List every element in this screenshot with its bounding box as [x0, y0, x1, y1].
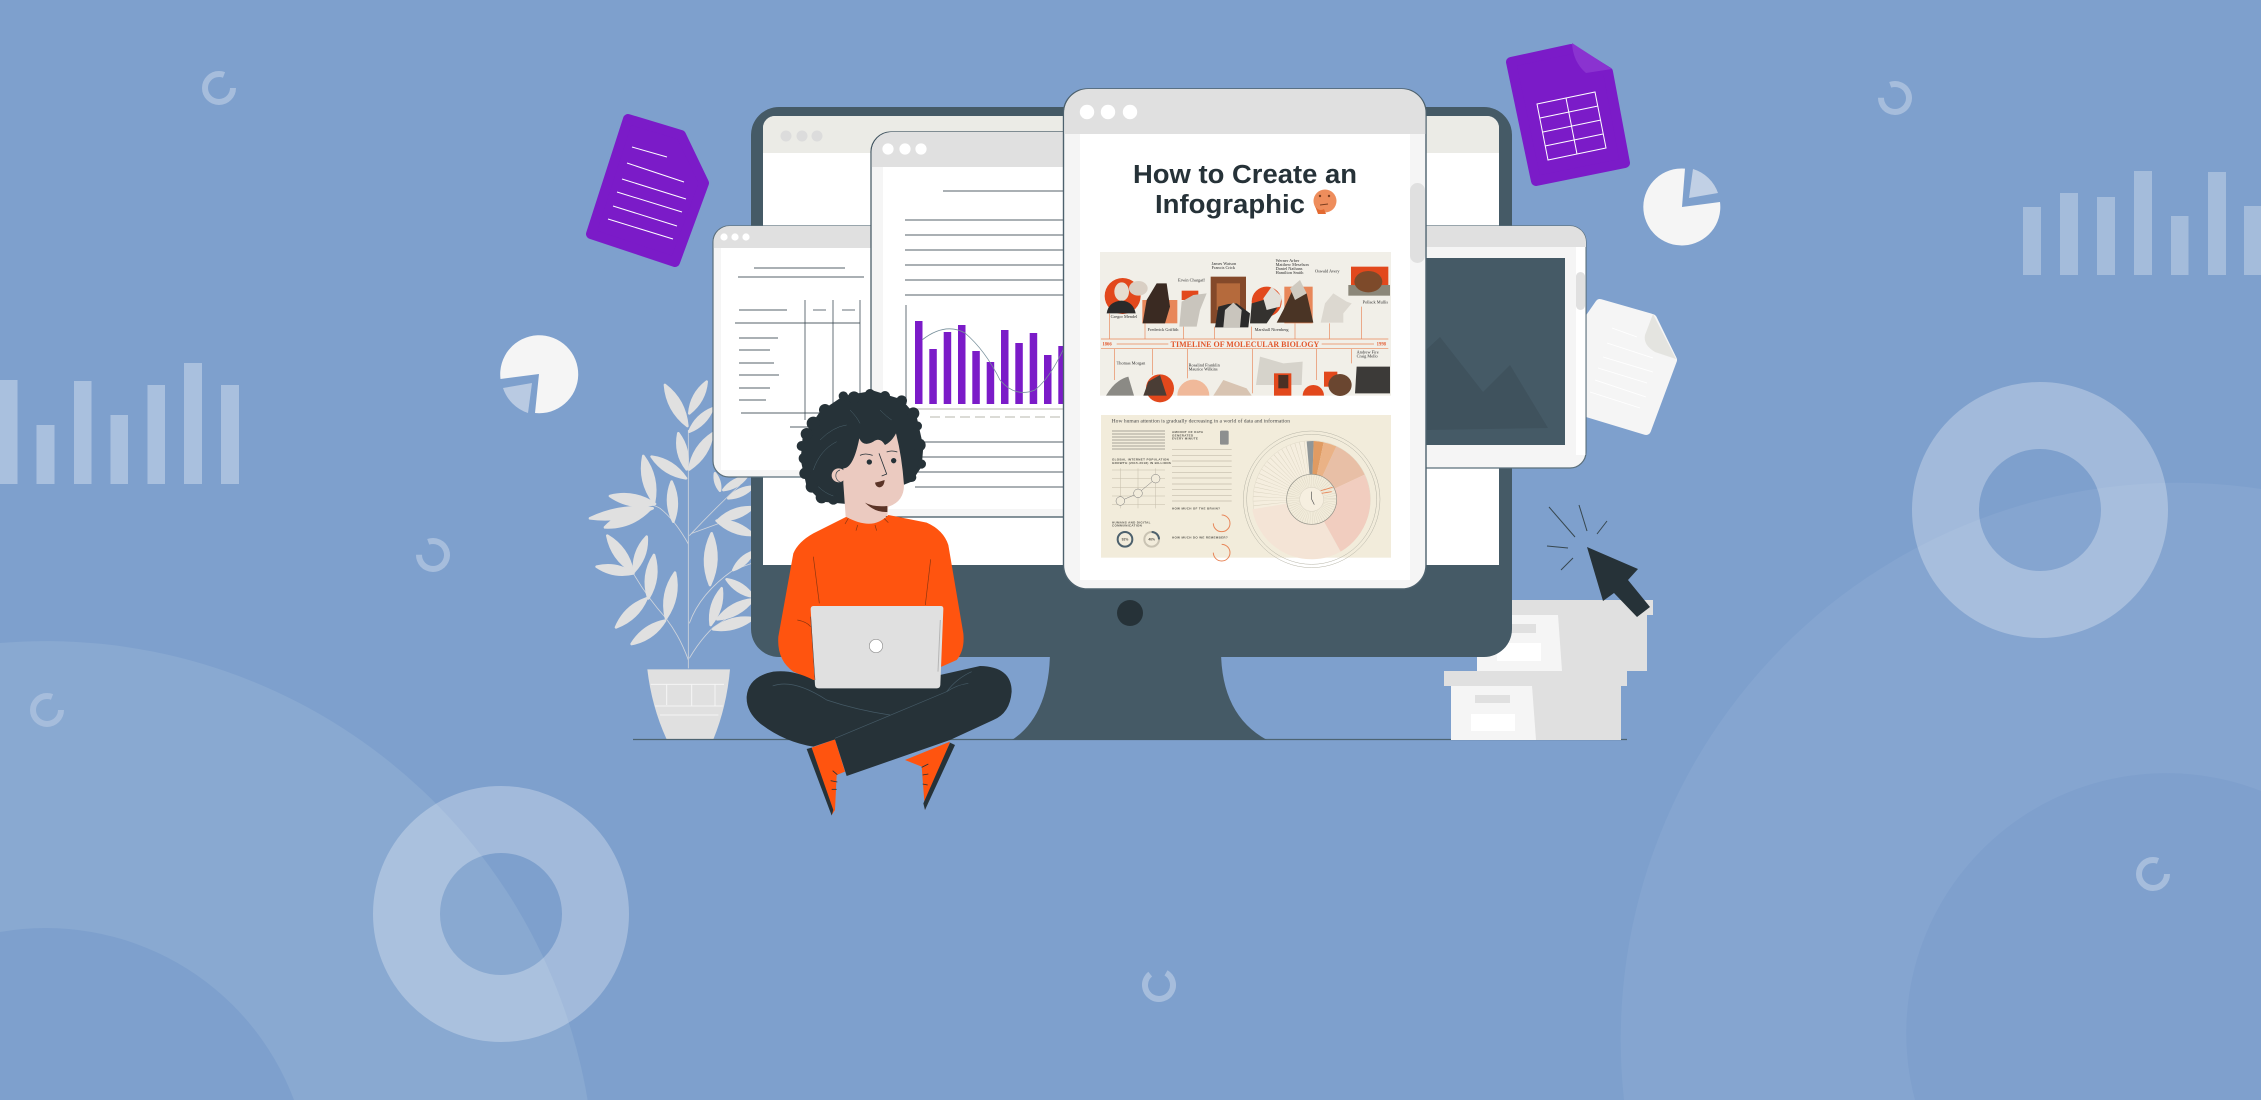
bar decoration: left [0, 363, 239, 484]
image: timeline of molecular biology [1100, 252, 1391, 402]
intro text [1112, 431, 1165, 449]
platform list [1172, 449, 1232, 501]
face [843, 433, 904, 524]
timeline names: Matthew Meselson [1276, 262, 1310, 267]
labels: COMMUNICATION [1112, 524, 1142, 528]
timeline names: James Watson [1212, 261, 1237, 266]
window: bar chart [871, 132, 1171, 517]
shoes [807, 739, 955, 816]
background circle: lower left [0, 641, 588, 1100]
monitor body [751, 107, 1512, 657]
timeline names: Oswald Avery [1315, 269, 1340, 274]
bar decoration: right [2023, 171, 2261, 275]
image: attention infographic [1101, 415, 1391, 568]
plant [590, 382, 753, 739]
timeline photo collage [1105, 267, 1390, 402]
labels: GENERATED [1172, 433, 1194, 437]
monitor [751, 107, 1512, 740]
timeline names: Thomas Morgan [1117, 360, 1146, 365]
cursor rays [1547, 505, 1607, 570]
upper box [1477, 600, 1653, 671]
heading [1133, 161, 1357, 219]
timeline names: Andrew Fire [1357, 349, 1379, 354]
background circle: lower right [1621, 483, 2261, 1100]
labels [1112, 430, 1228, 540]
ring: right [1946, 416, 2134, 604]
ear [832, 468, 846, 483]
heading: How to Create an [1133, 161, 1357, 189]
brows and nose [860, 451, 897, 476]
mouth [875, 480, 885, 487]
timeline names: Marshall Nirenberg [1255, 327, 1289, 332]
monitor button [1117, 600, 1143, 626]
window: right image placeholder [1300, 226, 1586, 468]
scrollbar [1410, 183, 1425, 263]
text lines [905, 191, 1065, 487]
small arcs [1213, 515, 1230, 561]
timeline heading: 1998 [1377, 343, 1387, 348]
timeline names: Pollack Mullis [1363, 299, 1388, 304]
infographic heading: How human attention is gradually decreasing in a world of data and information [1112, 417, 1290, 424]
labels: AMOUNT OF DATA [1172, 430, 1204, 434]
icon: pie chart left [500, 335, 578, 413]
person [747, 389, 1012, 816]
window: left table [713, 226, 933, 477]
image: attention infographic: 40% [1148, 538, 1155, 542]
timeline names: Erwin Chargaff [1178, 277, 1205, 282]
floating document: purple spreadsheet [1511, 43, 1625, 181]
sweater [778, 515, 964, 682]
lower box [1444, 671, 1627, 740]
table lines [735, 268, 864, 427]
timeline heading [1102, 340, 1387, 349]
icon: cursor arrow [1587, 547, 1650, 617]
timeline names: Gregor Mendel [1111, 314, 1138, 319]
timeline heading: TIMELINE OF MOLECULAR BIOLOGY [1171, 340, 1320, 349]
bar chart [906, 321, 1066, 417]
image placeholder [1300, 258, 1565, 445]
image: attention infographic: 92% [1122, 538, 1128, 542]
donut charts [1118, 532, 1159, 547]
timeline names: Werner Arber [1276, 258, 1300, 263]
storage boxes [1444, 600, 1653, 740]
timeline names: Frederick Griffith [1148, 327, 1179, 332]
timeline names: Francis Crick [1212, 265, 1236, 270]
timeline names: Hamilton Smith [1276, 270, 1304, 275]
data icon [1220, 431, 1229, 445]
labels: HUMANS AND DIGITAL [1112, 520, 1151, 524]
line chart [1112, 468, 1165, 508]
labels: HOW MUCH DO WE REMEMBER? [1172, 536, 1228, 540]
eyes [867, 458, 896, 465]
ground line [633, 738, 1627, 740]
timeline axis [1101, 307, 1388, 393]
labels: GLOBAL INTERNET POPULATION [1112, 458, 1169, 462]
monitor stand [1012, 650, 1267, 740]
labels: HOW MUCH OF THE BRAIN? [1172, 507, 1220, 511]
floating document: purple text file [591, 119, 704, 262]
ring: lower left [406, 820, 596, 1008]
monitor screen [763, 116, 1499, 565]
timeline names: Maurice Wilkins [1189, 367, 1218, 372]
timeline names: Daniel Nathans [1276, 266, 1303, 271]
heading: Infographic [1155, 191, 1305, 219]
labels: GROWTH (2015-2018) IN BILLIONS [1112, 461, 1171, 465]
beard [865, 503, 887, 512]
plant pot [647, 669, 730, 739]
radial chart [1243, 431, 1380, 568]
hair [797, 389, 926, 505]
icon: thinking face [1314, 190, 1336, 214]
trousers [747, 666, 1012, 776]
main window: article [1064, 89, 1426, 589]
floating document: white page [1575, 304, 1676, 430]
timeline names: Rosalind Franklin [1189, 363, 1221, 368]
timeline names: Craig Mello [1357, 353, 1378, 358]
laptop [811, 606, 943, 688]
timeline names [1111, 258, 1388, 372]
labels: EVERY MINUTE [1172, 437, 1198, 441]
timeline heading: 1866 [1102, 343, 1112, 348]
icon: pie chart right [1643, 168, 1720, 245]
loading spinners [33, 74, 2167, 1004]
scrollbar [1576, 272, 1585, 310]
